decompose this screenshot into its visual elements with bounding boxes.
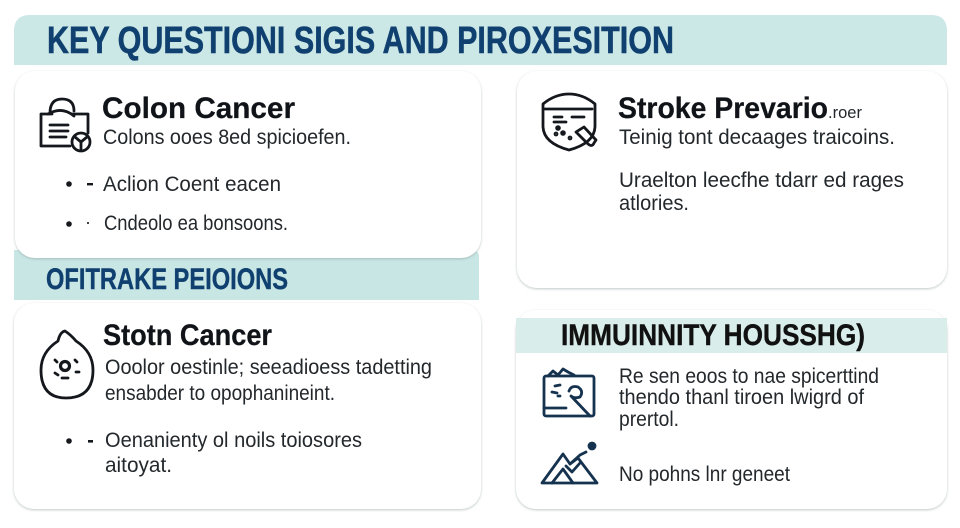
bullet two: Cndeolo ea bonsoons. bbox=[104, 211, 288, 235]
icon: mountains bbox=[542, 443, 597, 483]
text block: Ooolor oestinle; seeadioess tadetting bbox=[105, 355, 432, 379]
text block: thendo thanl tiroen lwigrd of bbox=[619, 385, 864, 409]
panel: stroke prevention bbox=[517, 71, 947, 288]
text block bbox=[105, 355, 432, 405]
text block: prertol. bbox=[619, 407, 679, 431]
text block: No pohns lnr geneet bbox=[619, 462, 790, 486]
text block: Teinig tont decaages traicoins. bbox=[619, 125, 895, 149]
icon: clipboard bbox=[41, 99, 90, 151]
heading: .roer bbox=[828, 103, 862, 122]
text block: Uraelton leecfhe tdarr ed rages bbox=[619, 168, 904, 192]
icon: shield bbox=[543, 94, 596, 150]
heading: Colon Cancer bbox=[102, 92, 296, 125]
bullet: aitoyat. bbox=[105, 453, 172, 477]
heading: Stotn Cancer bbox=[103, 319, 272, 352]
section banner bbox=[14, 250, 479, 300]
title banner: KEY QUESTIONI SIGIS AND PIROXESITION bbox=[47, 20, 674, 62]
bullet: Oenanienty ol noils toiosores bbox=[105, 428, 362, 452]
text block bbox=[619, 168, 904, 215]
bullet one: Aclion Coent eacen bbox=[103, 172, 281, 196]
section banner: IMMUINNITY HOUSSHG) bbox=[561, 319, 865, 352]
text block bbox=[619, 364, 879, 431]
bullet bbox=[66, 428, 362, 477]
icon: framed magnifier bbox=[544, 369, 594, 416]
panel: colon cancer bbox=[15, 71, 481, 258]
text block: atlories. bbox=[619, 191, 689, 215]
text block: Re sen eoos to nae spicerttind bbox=[619, 364, 879, 388]
icon: droplet bbox=[41, 331, 93, 398]
text block: ensabder to opophanineint. bbox=[105, 381, 335, 405]
section banner: OFITRAKE PEIOIONS bbox=[46, 263, 288, 296]
panel: immunity housing bbox=[516, 310, 947, 509]
text block: Colons ooes 8ed spicioefen. bbox=[103, 125, 351, 149]
heading: Stroke Prevario bbox=[618, 92, 828, 125]
panel: stotn cancer bbox=[14, 303, 481, 509]
